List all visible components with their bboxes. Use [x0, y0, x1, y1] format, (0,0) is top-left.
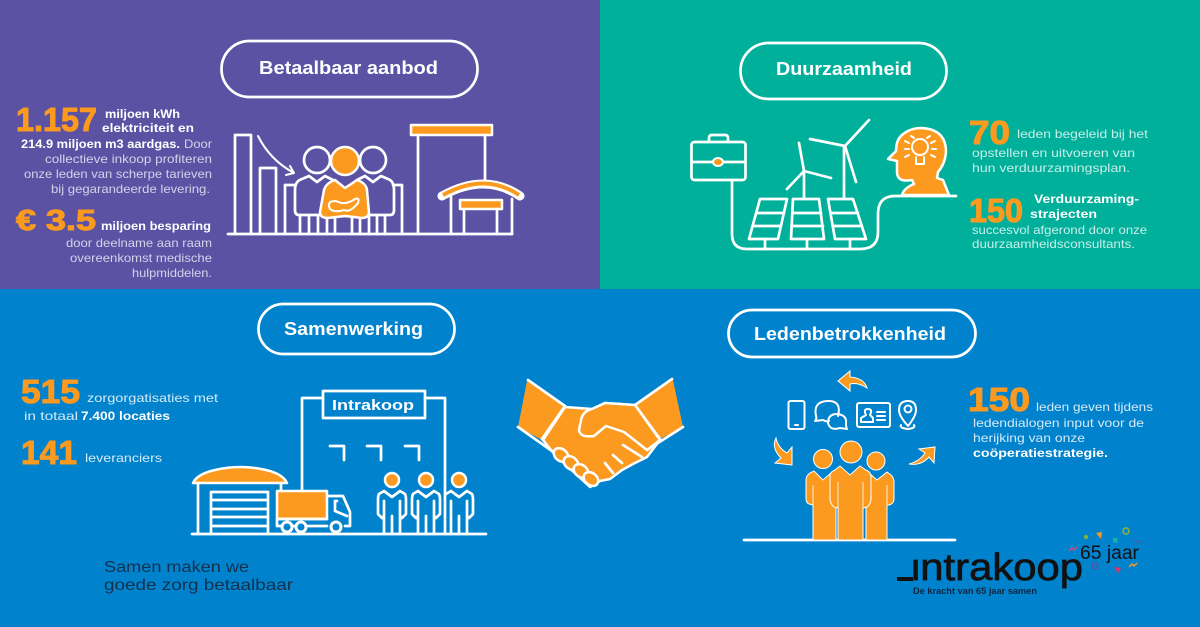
text block: guided members — [969, 114, 1149, 175]
slogan — [104, 559, 294, 594]
text block: energy purchasing: 214.9 miljoen m3 aardgas. — [21, 137, 180, 151]
heading: Betaalbaar aanbod — [222, 41, 478, 97]
text block: savings: € 3.5 — [16, 205, 96, 237]
illustration: bars, members and building — [228, 125, 520, 234]
text block: members — [21, 373, 219, 423]
text block: sustainability projects: duurzaamheidsconsultants. — [972, 237, 1135, 251]
text block: energy purchasing: elektriciteit en — [102, 121, 194, 135]
text block: sustainability projects — [969, 192, 1147, 251]
text block: suppliers: 141 — [21, 434, 77, 471]
text block: savings: miljoen besparing — [101, 219, 211, 233]
slogan: goede zorg betaalbaar — [104, 577, 294, 594]
heading: Betaalbaar aanbod: Betaalbaar aanbod — [259, 58, 438, 78]
text block: savings: overeenkomst medische — [70, 251, 212, 265]
logo: Intrakoop 65 jaar: 65 jaar — [1080, 543, 1140, 564]
icon: office building with sign: Intrakoop — [332, 397, 414, 414]
illustration: member engagement — [744, 371, 955, 540]
text block: sustainability projects: strajecten — [1030, 207, 1097, 221]
icon: office building with sign — [302, 391, 445, 534]
fingers — [551, 445, 601, 489]
text block: suppliers: leveranciers — [85, 451, 162, 465]
text block: guided members: 70 — [969, 114, 1010, 151]
illustration: briefcase, solar panels, wind turbines and consultant — [692, 120, 956, 249]
panel: collaboration and member engagement background — [0, 289, 1200, 627]
text block: energy purchasing: Door — [184, 137, 212, 151]
text block: savings — [16, 205, 212, 280]
text block: sustainability projects: 150 — [969, 192, 1023, 229]
heading: Samenwerking: Samenwerking — [284, 319, 423, 339]
logo: Intrakoop 65 jaar: De kracht van 65 jaar samen — [913, 586, 1037, 596]
text block: suppliers — [21, 434, 162, 471]
confetti — [1069, 528, 1141, 573]
text block: savings: door deelname aan raam — [66, 236, 212, 250]
text block: energy purchasing: 1.157 — [16, 101, 97, 138]
text block: energy purchasing: miljoen kWh — [105, 107, 180, 121]
panel: sustainability background — [600, 0, 1200, 289]
text block: member dialogues: herijking van onze — [973, 431, 1085, 445]
text block: savings: hulpmiddelen. — [132, 266, 212, 280]
text block: members: zorgorgatisaties met — [87, 391, 219, 405]
text block: sustainability projects: Verduurzaming- — [1034, 192, 1139, 206]
text block: guided members: hun verduurzamingsplan. — [972, 161, 1130, 175]
text block: members: in totaal — [24, 409, 78, 423]
icon: three members — [806, 441, 894, 540]
icon: warehouse — [193, 467, 287, 534]
heading: Duurzaamheid — [740, 43, 946, 99]
text block: members: 7.400 locaties — [81, 409, 170, 423]
arrow: price falling — [258, 136, 294, 175]
heading: Ledenbetrokkenheid — [728, 310, 976, 357]
text block: members: 515 — [21, 373, 80, 410]
text block: member dialogues: 150 — [968, 381, 1030, 418]
icon: circular arrows — [774, 371, 935, 465]
text block: member dialogues — [968, 381, 1153, 460]
text block: member dialogues: coöperatiestrategie. — [973, 446, 1108, 460]
illustration: warehouse, truck, Intrakoop office and staff — [192, 391, 486, 534]
text block: energy purchasing: bij gegarandeerde levering. — [51, 182, 210, 196]
icon: three staff members — [378, 473, 473, 534]
text block: guided members: leden begeleid bij het — [1017, 127, 1149, 141]
icon: chat bubbles — [815, 401, 847, 429]
heading: Samenwerking — [258, 304, 454, 354]
icon: briefcase — [692, 135, 746, 180]
icon: wind turbines — [787, 120, 869, 199]
icon: handshake — [518, 379, 683, 489]
icon: solar panels — [749, 199, 866, 249]
logo: Intrakoop 65 jaar: intrakoop — [911, 547, 1083, 589]
heading: Ledenbetrokkenheid: Ledenbetrokkenheid — [754, 324, 946, 344]
text block: sustainability projects: succesvol afgerond door onze — [972, 223, 1147, 237]
text block: guided members: opstellen en uitvoeren van — [972, 146, 1135, 160]
text block: energy purchasing: onze leden van scherpe tarieven — [24, 167, 212, 181]
panel: affordable offer background — [0, 0, 600, 289]
icon: ID card — [857, 403, 890, 427]
heading: Duurzaamheid: Duurzaamheid — [776, 59, 912, 79]
text block: member dialogues: ledendialogen input voor de — [973, 416, 1144, 430]
text block: energy purchasing — [16, 101, 212, 196]
icon: head with light bulb — [888, 128, 949, 195]
icon: truck — [277, 491, 350, 532]
logo: Intrakoop 65 jaar — [897, 528, 1141, 596]
text block: member dialogues: leden geven tijdens — [1036, 400, 1153, 414]
text block: energy purchasing: collectieve inkoop profiteren — [45, 152, 212, 166]
icon: location pin — [899, 401, 916, 429]
slogan: Samen maken we — [104, 559, 249, 576]
icon: phone — [788, 401, 804, 429]
